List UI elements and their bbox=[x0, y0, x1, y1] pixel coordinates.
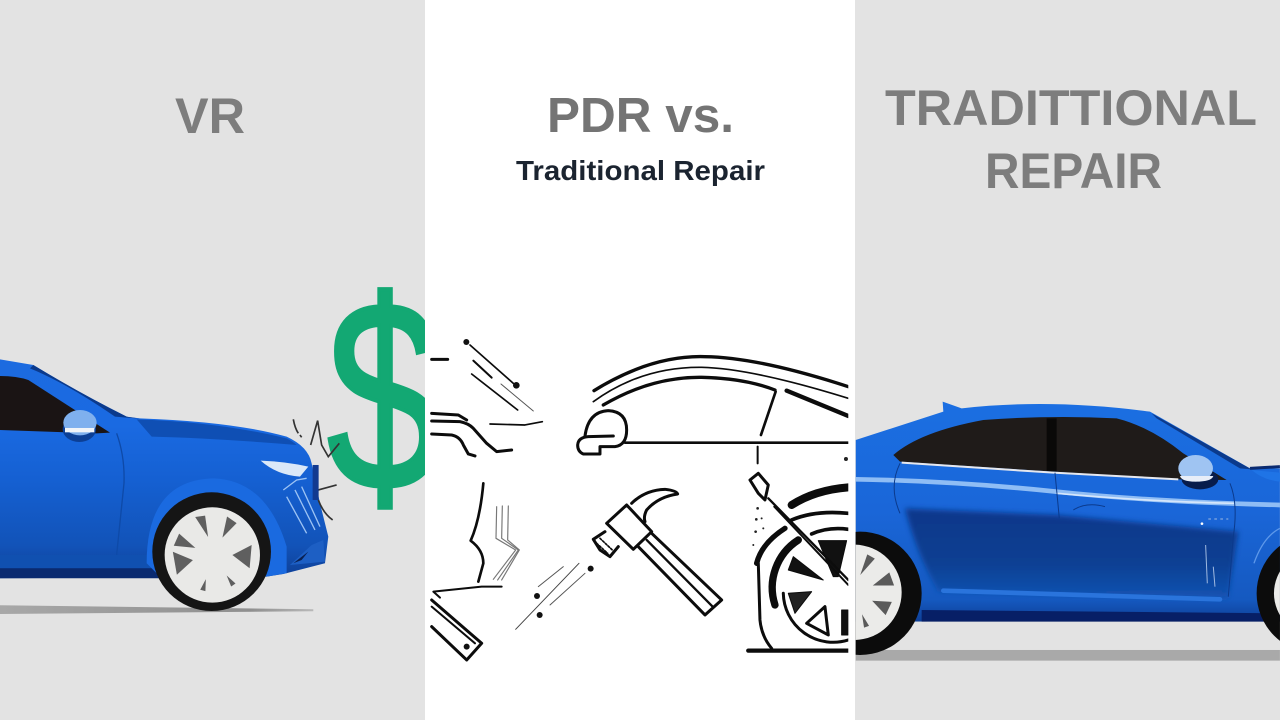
illustration: blue car with damaged front bbox=[0, 359, 339, 614]
heading: TRADITTIONAL REPAIR bbox=[885, 80, 1257, 199]
panel: center background bbox=[425, 0, 855, 720]
car roof outline and mirror bbox=[578, 357, 848, 463]
wheel arch bbox=[147, 478, 287, 577]
door seam bbox=[117, 433, 124, 555]
panel: left VR background bbox=[0, 0, 425, 720]
pry tool bottom left bbox=[432, 587, 502, 660]
headlight bbox=[261, 461, 308, 477]
ground shadow bbox=[0, 605, 313, 614]
motion lines bbox=[516, 563, 594, 629]
heading: TRADITTIONAL REPAIR: REPAIR bbox=[985, 143, 1162, 199]
rear wheel bbox=[856, 532, 922, 655]
side mirror bbox=[63, 410, 97, 442]
bent panel lines bbox=[471, 483, 519, 582]
heading: VR: VR bbox=[175, 88, 245, 144]
scratch marks bbox=[1206, 519, 1228, 587]
front wheel bbox=[1256, 546, 1280, 641]
icon: hammer bbox=[593, 489, 722, 615]
chrome trim bbox=[902, 463, 1178, 479]
windows bbox=[893, 417, 1227, 480]
front wheel bbox=[152, 492, 271, 611]
illustration: blue car side view bbox=[856, 402, 1280, 661]
impact marks bbox=[293, 419, 339, 520]
dark door panel shading bbox=[905, 508, 1238, 598]
ground shadow bbox=[856, 650, 1280, 661]
car body bbox=[856, 402, 1280, 622]
wheel and fender with scraper tool bbox=[748, 457, 848, 651]
window bbox=[0, 376, 110, 433]
subheading: Traditional Repair: Traditional Repair bbox=[516, 155, 765, 186]
body highlights bbox=[856, 479, 1280, 599]
illustration: line art of car repair tools bbox=[432, 339, 848, 660]
icon: green dollar sign: $ bbox=[327, 245, 441, 546]
crumpled front bbox=[283, 478, 320, 533]
heading: TRADITTIONAL REPAIR: TRADITTIONAL bbox=[885, 80, 1257, 136]
car body bbox=[0, 359, 328, 578]
heading: PDR vs.: PDR vs. bbox=[547, 89, 734, 143]
panel: right traditional repair background bbox=[855, 0, 1280, 720]
side mirror bbox=[1178, 455, 1218, 489]
dent lines top left bbox=[432, 339, 542, 456]
door seams bbox=[894, 463, 1235, 597]
